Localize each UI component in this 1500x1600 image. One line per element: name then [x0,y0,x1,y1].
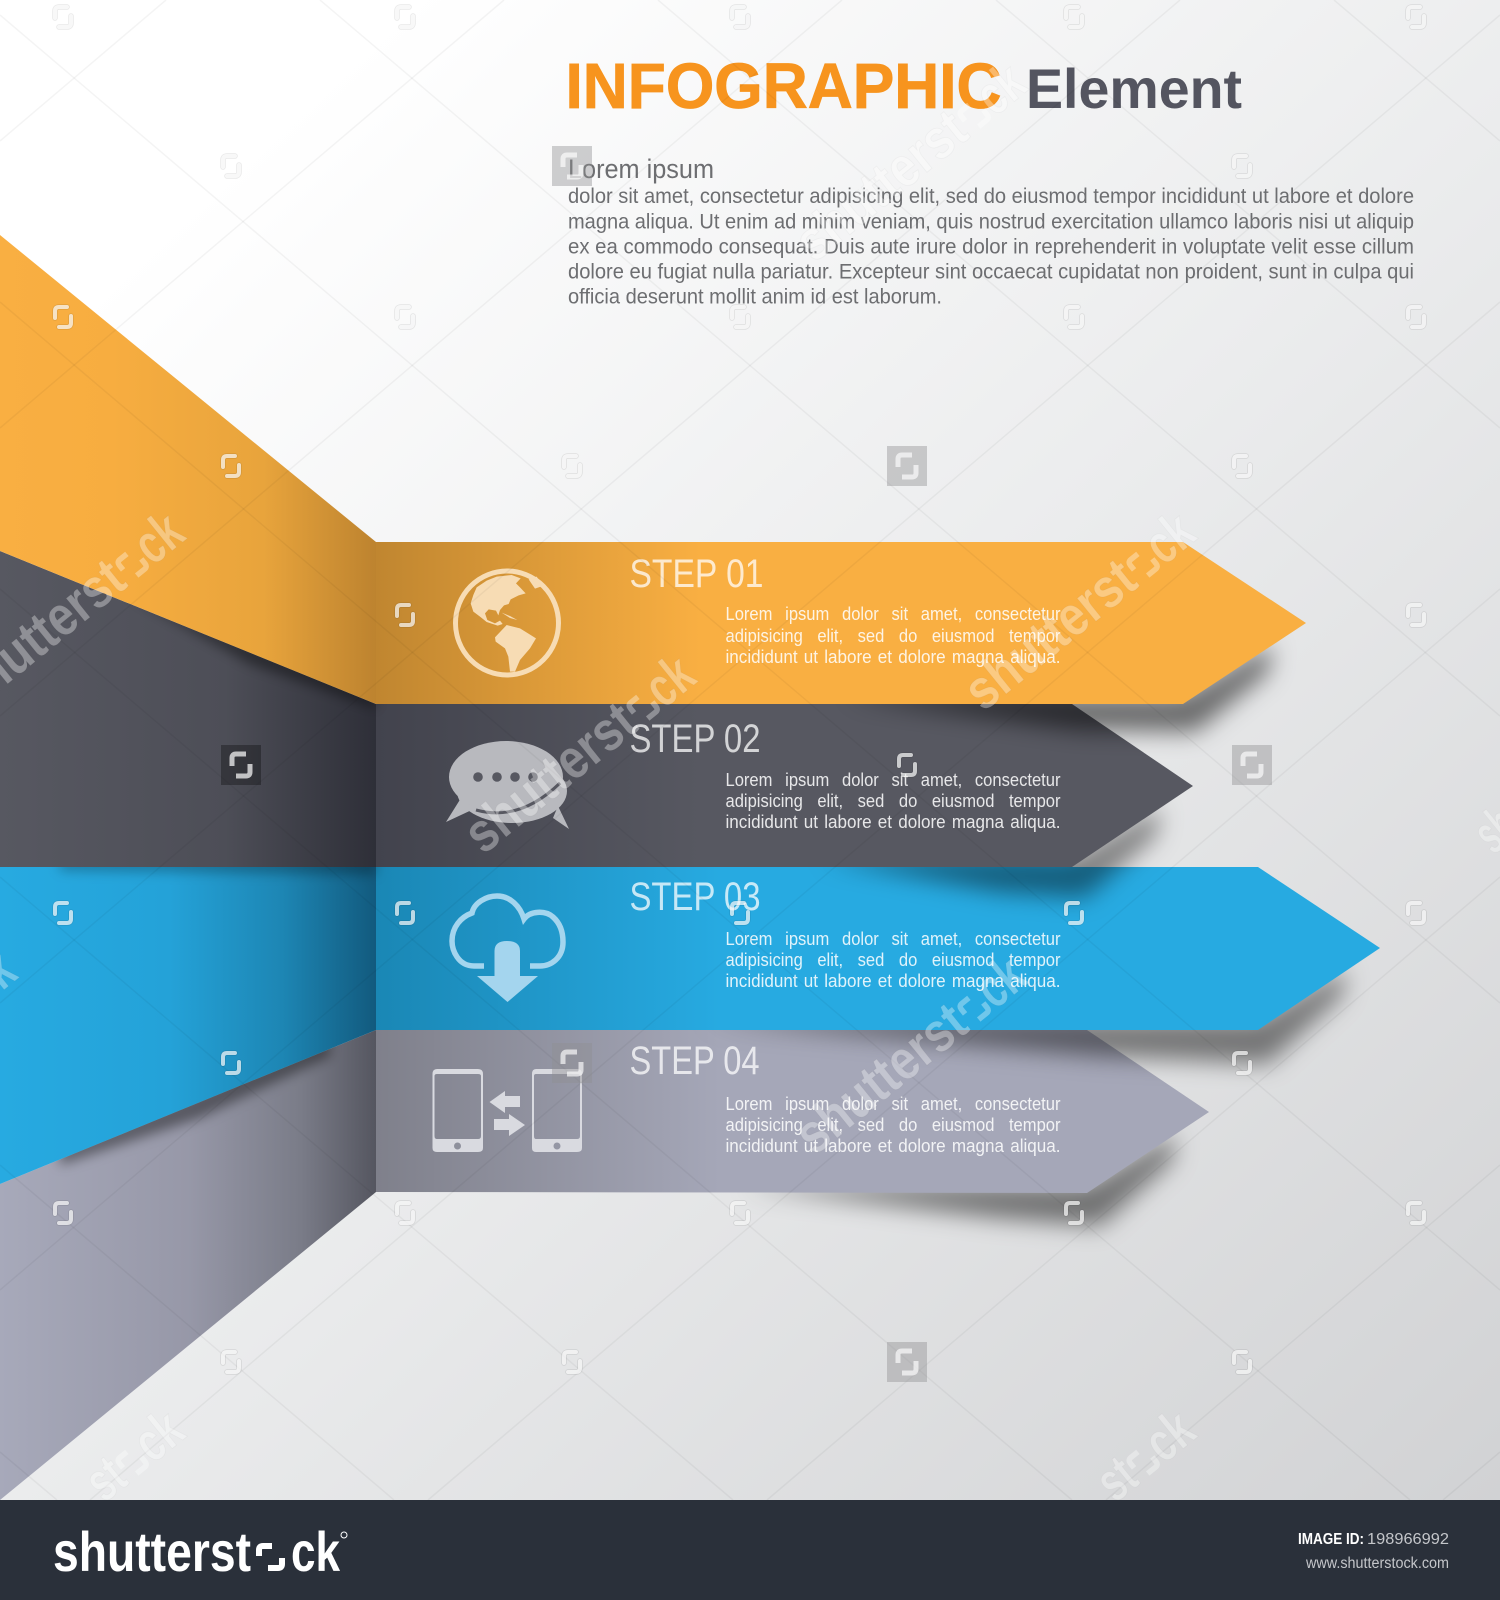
step 04 left fold [0,1030,376,1500]
watermark overlay: ck [120,1396,196,1474]
intro text block: dolor sit amet, consectetur adipisicing elit, sed do eiusmod tempor incididunt ut labore et dolore [568,185,1414,208]
intro text block: officia deserunt mollit anim id est laborum. [568,286,942,308]
image id [1298,1531,1449,1572]
title: INFOGRAPHIC [566,50,1002,122]
step 01 text: adipisicing elit, sed do eiusmod tempor [726,626,1060,646]
step 01 left fold [0,235,376,704]
watermark overlay: ck [1131,498,1207,576]
panel: step 04 ribbon [0,1030,1209,1500]
watermark overlay: shutterst [782,990,979,1166]
watermark overlay: shutterst [782,97,979,273]
step 02 text [630,717,1060,832]
footer bar [0,1500,1500,1600]
step 03 left fold [0,867,376,1184]
step 04 text: incididunt ut labore et dolore magna aliqua. [726,1136,1060,1156]
step 04 arrow [376,1030,1209,1193]
step 04 text: STEP 04 [630,1039,760,1083]
step 03 shadow on step 04 [700,970,1346,1064]
step 03 text: adipisicing elit, sed do eiusmod tempor [726,950,1060,970]
step 01 shadow [840,645,1272,732]
step 02 left fold [0,551,376,867]
step 02 text: Lorem ipsum dolor sit amet, consectetur [726,770,1060,790]
step 02 text: incididunt ut labore et dolore magna aliqua. [726,812,1060,832]
panel: step 01 ribbon [0,235,1306,732]
intro text block: ex ea commodo consequat. Duis aute irure dolor in reprehenderit in voluptate velit esse cillum [568,236,1414,258]
step 02 left shadow on blue [60,860,376,874]
footer logo: ck [291,1520,341,1583]
watermark overlay: ck [120,498,196,576]
step 03 text: Lorem ipsum dolor sit amet, consectetur [726,929,1060,949]
image id: 198966992 [1367,1531,1449,1548]
step 02 text: STEP 02 [630,717,760,761]
watermark overlay: ck [631,641,707,719]
intro text block: Lorem ipsum [568,154,714,184]
watermark overlay: st [72,1443,138,1513]
step 01 text: Lorem ipsum dolor sit amet, consectetur [726,604,1060,624]
step 01 text: STEP 01 [630,552,764,596]
title: Element [1026,57,1242,120]
icon: chat bubbles [446,741,569,829]
icon: phones exchanging data [432,1069,582,1152]
watermark overlay: st [1083,1443,1149,1513]
intro text block [568,154,1414,308]
step 02 text: adipisicing elit, sed do eiusmod tempor [726,791,1060,811]
step 01 text [630,552,1060,667]
step 04 text: adipisicing elit, sed do eiusmod tempor [726,1115,1060,1135]
watermark overlay: ck [962,49,1038,127]
step 03 fold shadow [60,1040,330,1165]
watermark overlay: ck [962,942,1038,1020]
step 04 text [630,1039,1060,1156]
step 01 arrow [376,542,1306,704]
step 03 text: STEP 03 [630,875,760,919]
step 03 text: incididunt ut labore et dolore magna aliqua. [726,971,1060,991]
step 03 arrow [376,867,1380,1030]
icon: globe [456,571,558,675]
step 02 shadow on step 03 [820,808,1160,898]
image id: www.shutterstock.com [1305,1555,1449,1572]
footer logo: shutterst [53,1520,251,1583]
step 01 text: incididunt ut labore et dolore magna aliqua. [726,647,1060,667]
watermark overlay: shutterst [451,689,648,865]
title [566,50,1242,122]
step 03 text [630,875,1060,991]
watermark overlay: ck [1131,1396,1207,1474]
step 01 fold shadow [120,590,376,708]
watermark overlay: shutterst [951,546,1148,722]
step 02 arrow [376,704,1193,867]
image id: IMAGE ID: [1298,1531,1364,1548]
icon: cloud download [452,896,563,1002]
intro text block: magna aliqua. Ut enim ad minim veniam, quis nostrud exercitation ullamco laboris nisi ut aliquip [568,210,1414,234]
step 04 text: Lorem ipsum dolor sit amet, consectetur [726,1094,1060,1114]
panel: step 02 ribbon [0,551,1193,898]
step 04 shadow [740,1135,1175,1226]
panel: step 03 ribbon [0,867,1380,1184]
intro text block: dolore eu fugiat nulla pariatur. Excepteur sint occaecat cupidatat non proident, sunt in culpa qui [568,260,1414,284]
